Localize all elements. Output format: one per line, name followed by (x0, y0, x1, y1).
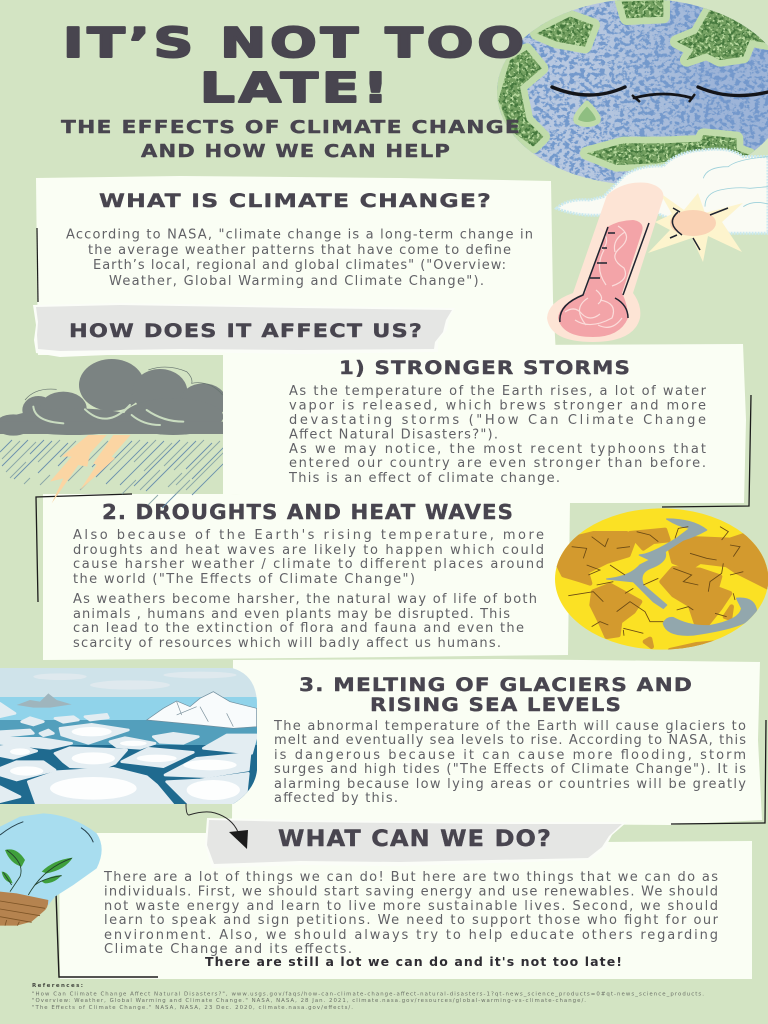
title: LATE! (200, 64, 392, 112)
heading: melting of glaciers (299, 674, 693, 716)
text block: droughts paragraph two (73, 592, 537, 651)
text block: storms paragraph: devastating storms ("How Can Climate Change (289, 413, 706, 428)
leaves (2, 849, 73, 895)
icon: melting glaciers illustration (0, 668, 257, 805)
banner: what can we do (205, 818, 627, 868)
heading: what can we do: WHAT CAN WE DO? (278, 827, 552, 852)
text block: NASA definition: According to NASA, "climate change is a long-term change in (66, 228, 533, 242)
icon: storm cloud with rain and lightning (0, 359, 236, 508)
text block: droughts paragraph two: scarcity of resources which will badly affect us humans. (73, 636, 501, 651)
text block: storms paragraph: As the temperature of the Earth rises, a lot of water (289, 384, 707, 399)
text block: what can we do paragraph: environment. Also, we should always try to help educate others regarding (104, 928, 718, 943)
icon: sun (648, 193, 743, 262)
banner: how does it affect us (33, 303, 455, 357)
text block: what can we do paragraph: learn to speak and sign petitions. We need to support those who fight for our (104, 913, 719, 928)
bulb base (0, 892, 48, 926)
text block: what can we do paragraph (103, 870, 719, 957)
text block: what can we do paragraph: Climate Change and its effects. (104, 942, 352, 957)
text block: storms paragraph (288, 384, 707, 486)
text block: NASA definition: Weather, Global Warming and Climate Change"). (109, 274, 484, 289)
panel: stronger storms (223, 344, 751, 507)
text block: droughts paragraph two: can lead to the extinction of flora and fauna and even the (73, 621, 524, 636)
text block: what can we do paragraph: individuals. First, we should start saving energy and use renewables. We should (104, 884, 718, 900)
text block: glaciers paragraph: affected by this. (274, 791, 398, 806)
title: IT’S NOT TOO (63, 19, 528, 67)
text block: storms paragraph: vapor is released, which brews stronger and more (289, 398, 706, 414)
text block: references (32, 983, 704, 1011)
text block: storms paragraph: entered our country are even stronger than before. (289, 456, 706, 471)
icon: white clouds (557, 149, 768, 233)
text block: glaciers paragraph: is dangerous because it can cause more flooding, storm (274, 748, 746, 763)
heading: what is climate change: WHAT IS CLIMATE CHANGE? (99, 190, 492, 212)
heading: melting of glaciers: 3. MELTING OF GLACIERS AND (299, 674, 693, 696)
heading: how does it affect us: HOW DOES IT AFFECT US? (69, 320, 423, 342)
text block: storms paragraph: Affect Natural Disasters?"). (289, 428, 498, 442)
text block: references: References: (32, 983, 83, 989)
subtitle: THE EFFECTS OF CLIMATE CHANGE (61, 117, 521, 138)
icon: light bulb with plant (0, 813, 102, 926)
text block: glaciers paragraph: surges and high tides ("The Effects of Climate Change"). It is (274, 762, 746, 777)
text block: NASA definition: the average weather patterns that have come to define (88, 243, 511, 258)
text block: droughts paragraph one: Also because of the Earth's rising temperature, more (73, 528, 544, 543)
text block: storms paragraph: As we may notice, the most recent typhoons that (289, 442, 706, 457)
subtitle (61, 117, 521, 162)
text block: droughts paragraph one (73, 528, 544, 587)
text block: references: "The Effects of Climate Change." NASA, NASA, 23 Dec. 2020, climate.nasa.gov/effects/. (32, 1005, 353, 1011)
text block: NASA definition (66, 228, 533, 289)
title (63, 19, 528, 112)
icon: cracked drought globe (550, 505, 768, 655)
heading: stronger storms: 1) STRONGER STORMS (339, 357, 631, 379)
text block: droughts paragraph one: the world ("The Effects of Climate Change") (73, 572, 415, 587)
subtitle: AND HOW WE CAN HELP (141, 141, 451, 162)
text block: references: "Overview: Weather, Global Warming and Climate Change." NASA, NASA, 28 Jan. 2021, climate.nasa.gov/resources/global-warming-vs-climate-change/. (32, 998, 586, 1004)
panel: melting glaciers (232, 659, 766, 825)
text block: what can we do paragraph: There are a lot of things we can do! But here are two things that we can do as (103, 870, 718, 885)
text block: references: "How Can Climate Change Affect Natural Disasters?", www.usgs.gov/faqs/how-can-climate-change-affect-natural-disasters-1?qt-news_science_products=0#qt-news_science_products. (32, 992, 704, 998)
text block: storms paragraph: This is an effect of climate change. (288, 471, 560, 486)
text block: droughts paragraph one: droughts and heat waves are likely to happen which could (73, 543, 544, 558)
callout: closing statement: There are still a lot we can do and it's not too late! (205, 954, 622, 969)
text block: what can we do paragraph: not waste energy and learn to live more sustainable lives. Second, we should (104, 899, 718, 914)
text block: droughts paragraph two: animals , humans and even plants may be disrupted. This (73, 607, 510, 622)
panel: what is climate change (36, 176, 556, 355)
heading: melting of glaciers: RISING SEA LEVELS (370, 694, 622, 716)
icon: thermometer (547, 182, 663, 342)
text block: droughts paragraph two: As weathers become harsher, the natural way of life of both (73, 592, 537, 607)
text block: NASA definition: Earth’s local, regional and global climates" ("Overview: (93, 258, 506, 273)
text block: glaciers paragraph: The abnormal temperature of the Earth will cause glaciers to (273, 719, 746, 734)
text block: glaciers paragraph: alarming because low lying areas or countries will be greatly (274, 777, 746, 792)
heading: droughts and heat waves: 2. DROUGHTS AND HEAT WAVES (102, 500, 514, 524)
text block: droughts paragraph one: cause harsher weather / climate to different places around (73, 557, 544, 572)
panel: what can we do (56, 833, 752, 979)
arrow: to what can we do (186, 804, 248, 849)
text block: glaciers paragraph (273, 719, 746, 806)
text block: glaciers paragraph: melt and eventually sea levels to rise. According to NASA, this (274, 733, 746, 748)
icon: crying earth (490, 0, 768, 190)
panel: droughts and heat waves (36, 494, 570, 660)
